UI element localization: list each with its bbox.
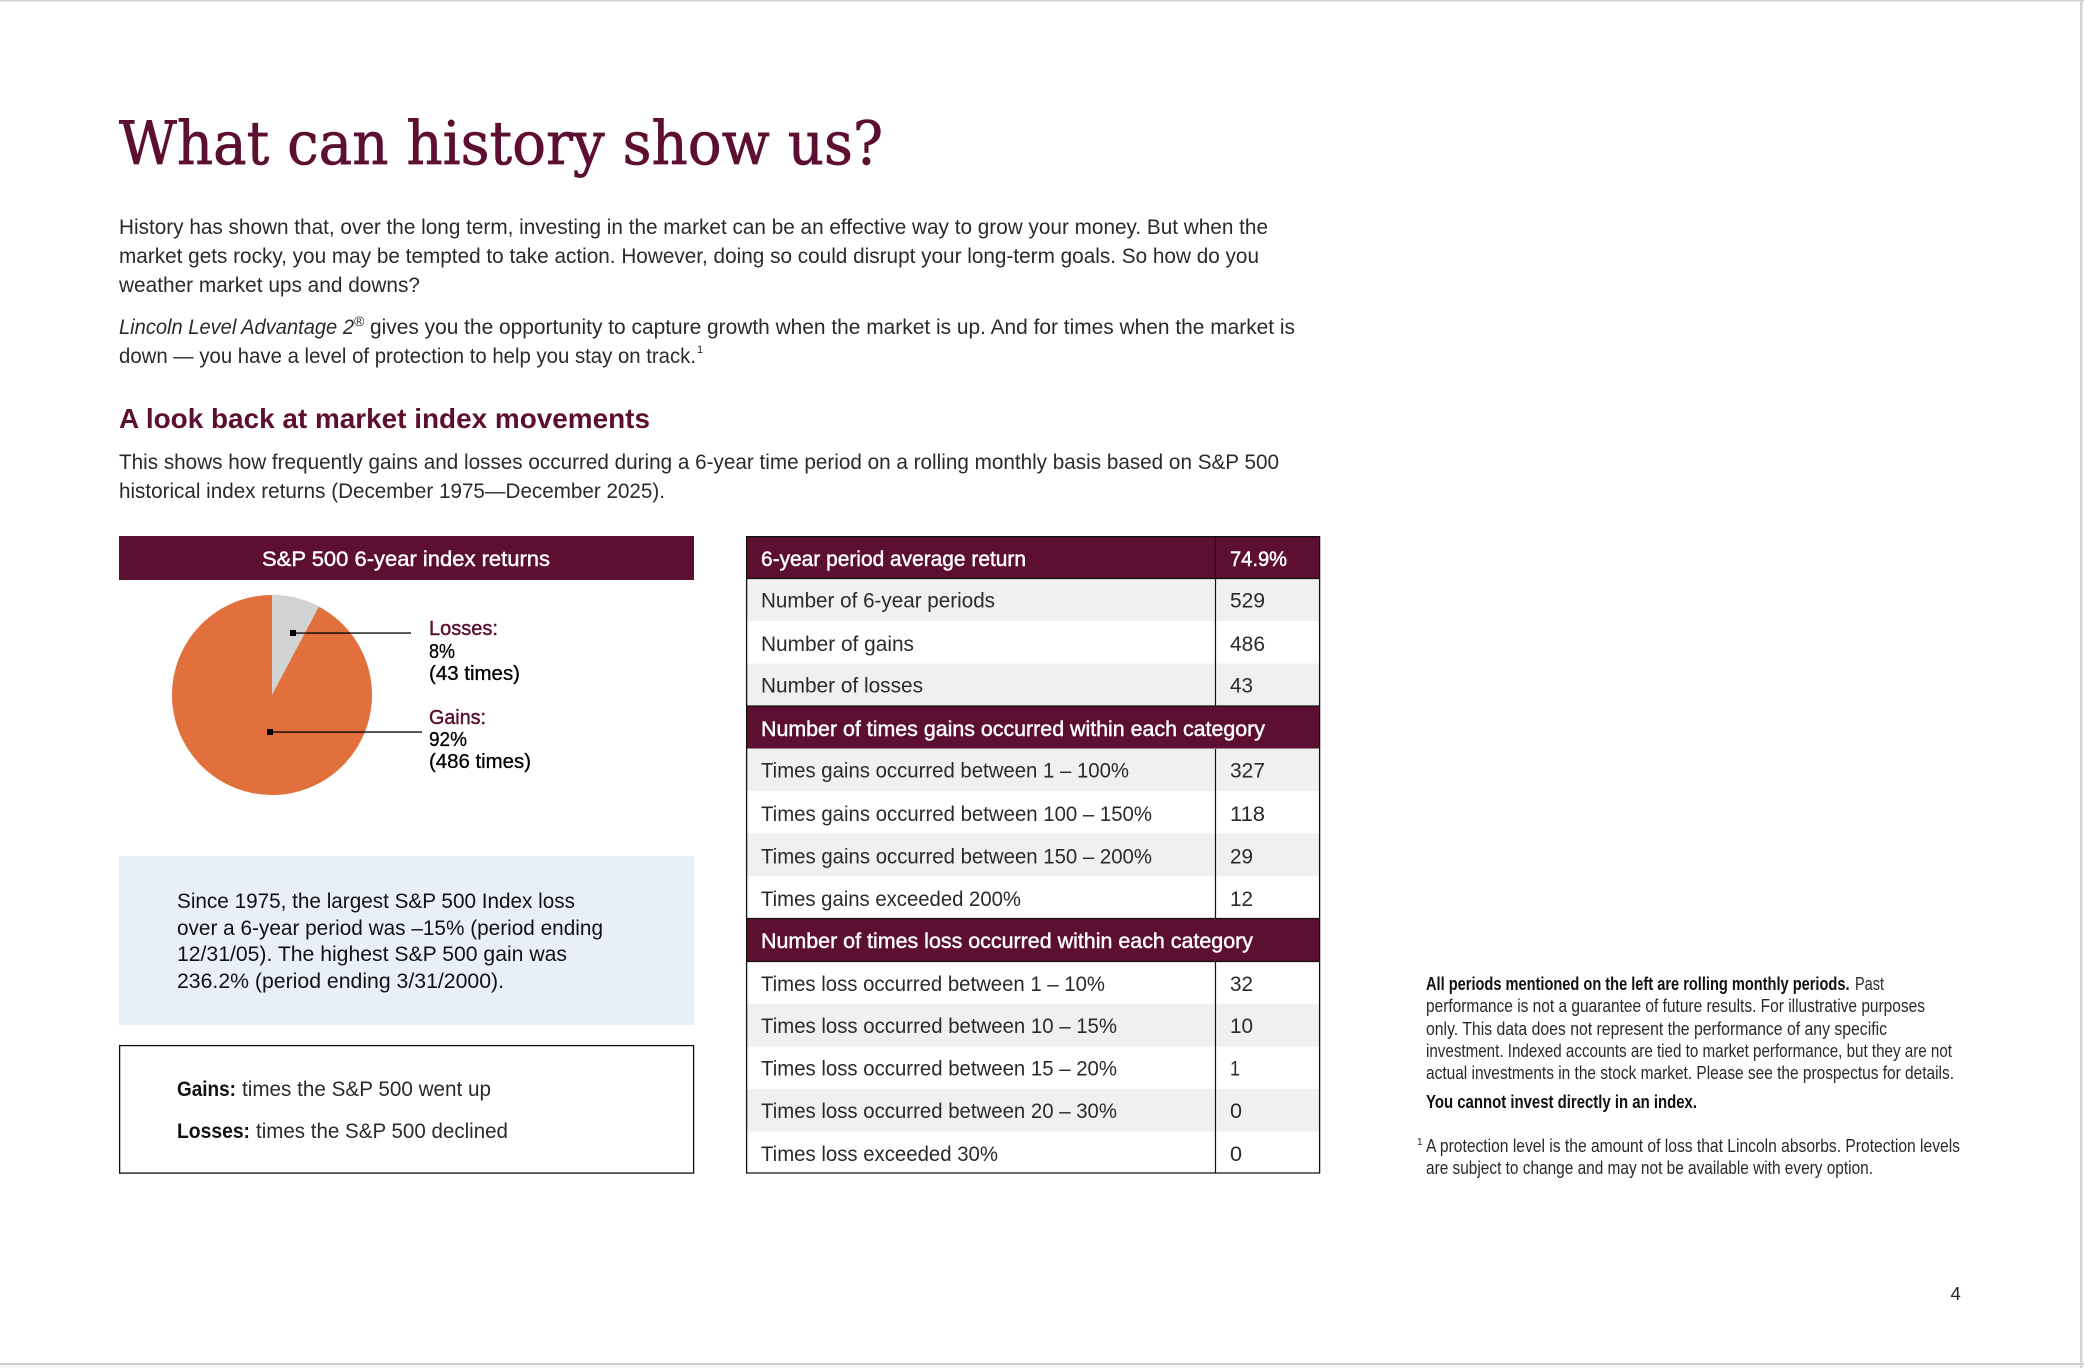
section description: historical index returns (December 1975—December 2025). <box>119 479 665 503</box>
intro text block: market gets rocky, you may be tempted to take action. However, doing so could disrupt your long-term goals. So how do you <box>119 244 1259 268</box>
disclosure text: All periods mentioned on the left are rolling monthly periods. <box>1426 973 1850 994</box>
disclosure text <box>1426 973 1954 1112</box>
gains label: (486 times) <box>429 750 531 773</box>
losses label: 8% <box>429 640 455 663</box>
callout: largest loss and highest gain: 12/31/05). The highest S&P 500 gain was <box>177 943 567 966</box>
gains label: Gains: <box>429 706 486 729</box>
losses label: (43 times) <box>429 662 520 685</box>
table section: losses: 10 <box>1230 1014 1253 1038</box>
table section: gains: Number of times gains occurred within each category <box>761 717 1265 741</box>
footnote <box>1417 1135 1960 1178</box>
table row shading <box>746 536 1320 1173</box>
table section: overview: Number of 6-year periods <box>761 588 995 612</box>
disclosure text: investment. Indexed accounts are tied to market performance, but they are not <box>1426 1040 1952 1061</box>
product text block: ® <box>354 313 365 329</box>
table section: losses: Times loss occurred between 15 – 20% <box>761 1056 1117 1080</box>
disclosure text: performance is not a guarantee of future results. For illustrative purposes <box>1426 995 1925 1016</box>
product text block: gives you the opportunity to capture growth when the market is up. And for times when the market is <box>370 315 1295 339</box>
disclosure text: only. This data does not represent the performance of any specific <box>1426 1018 1887 1039</box>
table section: overview: Number of losses <box>761 674 923 698</box>
product text block <box>119 313 1295 368</box>
panel: definitions: Losses: <box>177 1120 250 1143</box>
gains label: 92% <box>429 728 467 751</box>
losses label: Losses: <box>429 617 498 640</box>
table section: losses: Times loss occurred between 1 – 10% <box>761 972 1105 996</box>
table section: gains: 12 <box>1230 887 1253 911</box>
callout: largest loss and highest gain: over a 6-year period was –15% (period ending <box>177 917 603 940</box>
section description: This shows how frequently gains and losses occurred during a 6-year time period on a rolling monthly basis based on S&P 500 <box>119 450 1279 474</box>
table section: overview: 6-year period average return <box>761 547 1026 571</box>
disclosure text: You cannot invest directly in an index. <box>1426 1091 1697 1112</box>
table section: overview: Number of gains <box>761 632 914 656</box>
table section: gains: 118 <box>1230 802 1265 826</box>
table section: losses: 0 <box>1230 1099 1242 1123</box>
table section: losses: Times loss occurred between 20 – 30% <box>761 1099 1117 1123</box>
table section: gains: Times gains occurred between 150 – 200% <box>761 844 1152 868</box>
table section: losses: Times loss occurred between 10 – 15% <box>761 1014 1117 1038</box>
panel: definitions: times the S&P 500 declined <box>256 1119 508 1143</box>
table section: overview: 74.9% <box>1230 547 1287 571</box>
callout: largest loss and highest gain <box>119 856 694 1025</box>
section description <box>119 450 1279 503</box>
gains leader line <box>267 729 422 735</box>
disclosure text: actual investments in the stock market. Please see the prospectus for details. <box>1426 1062 1954 1083</box>
product text block: 1 <box>697 344 703 356</box>
intro text block: weather market ups and downs? <box>118 273 420 297</box>
chart header <box>119 536 694 580</box>
table section: gains <box>761 717 1265 911</box>
table section: losses: Number of times loss occurred within each category <box>761 929 1253 953</box>
chart header: S&P 500 6-year index returns <box>262 547 550 571</box>
product text block: Lincoln Level Advantage 2 <box>119 315 354 339</box>
table section: gains: Times gains exceeded 200% <box>761 887 1021 911</box>
gains label <box>429 706 531 773</box>
intro text block: History has shown that, over the long term, investing in the market can be an effective way to grow your money. But when the <box>119 215 1268 239</box>
table section: gains: 327 <box>1230 758 1265 782</box>
table section: gains: 29 <box>1230 844 1253 868</box>
panel: definitions <box>120 1046 694 1173</box>
losses leader line <box>290 630 411 636</box>
table section: losses: 32 <box>1230 972 1253 996</box>
section heading: A look back at market index movements <box>119 403 650 434</box>
table section: losses: 0 <box>1230 1142 1242 1166</box>
product text block: down — you have a level of protection to help you stay on track. <box>119 344 696 368</box>
table section: losses: Times loss exceeded 30% <box>761 1142 998 1166</box>
table section: losses: 1 <box>1230 1056 1240 1080</box>
panel: pie chart <box>119 536 694 795</box>
table section: overview: 43 <box>1230 674 1253 698</box>
pie chart <box>172 595 372 795</box>
panel: definitions: Gains: <box>177 1078 236 1101</box>
table section: losses <box>761 929 1253 1166</box>
table section: gains: Times gains occurred between 1 – 100% <box>761 758 1129 782</box>
table section: gains: Times gains occurred between 100 – 150% <box>761 802 1152 826</box>
panel: definitions: times the S&P 500 went up <box>242 1077 491 1101</box>
title: What can history show us? <box>119 109 883 179</box>
disclosure text: Past <box>1855 973 1884 994</box>
footnote: A protection level is the amount of loss that Lincoln absorbs. Protection levels <box>1426 1135 1960 1156</box>
footnote: 1 <box>1417 1137 1423 1148</box>
callout: largest loss and highest gain: 236.2% (period ending 3/31/2000). <box>177 970 504 993</box>
intro text block <box>118 215 1268 297</box>
panel: data table <box>746 536 1320 1173</box>
callout: largest loss and highest gain: Since 1975, the largest S&P 500 Index loss <box>177 890 575 913</box>
table section: overview: 486 <box>1230 632 1265 656</box>
losses label <box>429 617 520 685</box>
page number: 4 <box>1950 1283 1961 1304</box>
table section: overview: 529 <box>1230 588 1265 612</box>
footnote: are subject to change and may not be available with every option. <box>1426 1157 1873 1178</box>
table section: overview <box>761 547 1287 698</box>
